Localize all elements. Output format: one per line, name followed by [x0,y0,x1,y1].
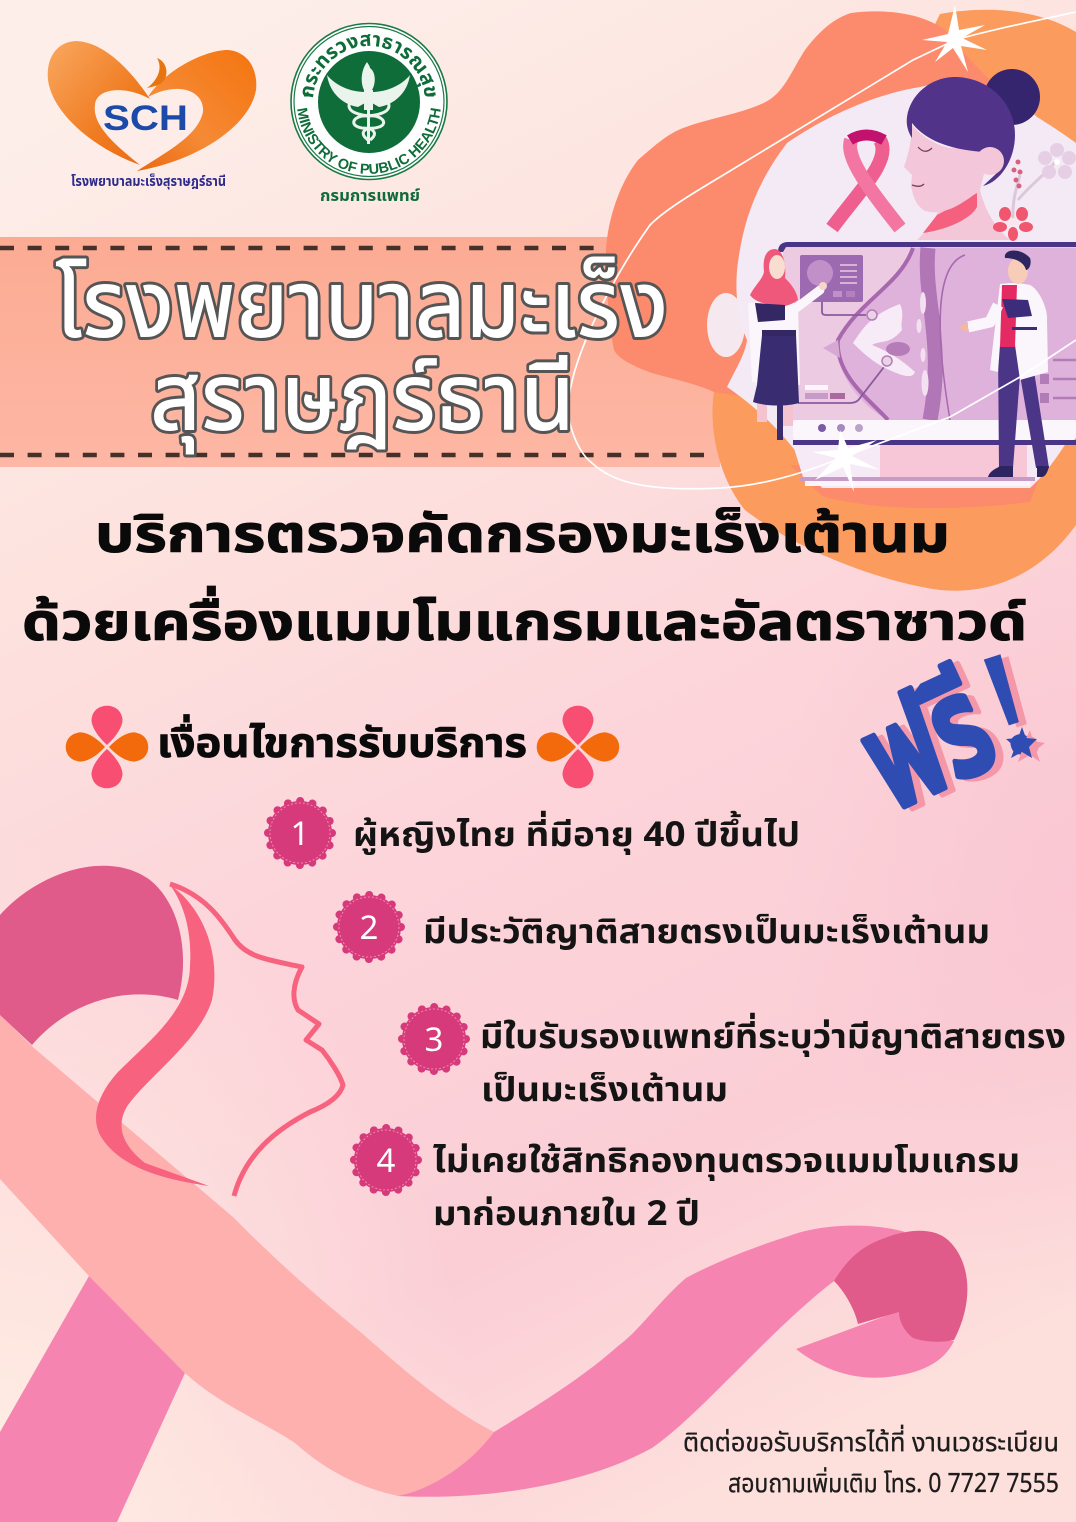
condition 4 [354,1128,1020,1241]
condition 3: เป็นมะเร็งเต้านม [481,1066,728,1117]
decorative blobs behind illustration [606,10,1076,591]
condition 1 [268,801,800,865]
ribbon curl tail [796,1311,954,1378]
contact information [683,1423,1059,1504]
caduceus emblem [327,62,410,144]
ribbon curl [834,1231,967,1342]
title: hospital name: สุราษฎร์ธานี [150,329,575,473]
logo: Ministry of Public Health seal: MINISTRY OF PUBLIC HEALTH [297,108,441,174]
pink ribbon [832,135,900,228]
lilac backdrop [727,84,1076,488]
flower icon left [66,706,148,788]
condition 1: ผู้หญิงไทย ที่มีอายุ 40 ปีขึ้นไป [353,810,800,862]
hair strand [96,885,214,1186]
illustration: mammogram screening [727,69,1076,488]
badge 2: 2 [360,904,378,954]
ribbon right band [398,1226,905,1497]
heading: service name: บริการตรวจคัดกรองมะเร็งเต้านม [95,498,950,576]
logo: Ministry of Public Health seal [290,22,448,209]
badge 1: 1 [291,810,309,860]
free stamp: ฟรี [837,628,1037,871]
flower sprig [993,143,1076,241]
doctor [958,250,1049,477]
screen [778,242,1076,420]
banner panel [0,237,720,467]
ribbon salmon band [0,1015,494,1496]
badge 2 [337,895,401,959]
seal text: กระทรวงสาธารณสุข [302,34,436,98]
heading: service name: ด้วยเครื่องแมมโมแกรมและอัลตราซาวด์ [22,586,1027,664]
condition 2 [337,895,990,959]
console [793,420,1076,486]
badge 3: 3 [425,1016,443,1066]
badge 4 [354,1128,418,1192]
contact information: ติดต่อขอรับบริการได้ที่ งานเวชระเบียน [683,1423,1059,1463]
flower icon right [537,706,619,788]
conditions heading [66,706,619,788]
logo wordmark: SCH [103,99,188,138]
free stamp: ! [959,604,1061,818]
woman [904,69,1040,240]
condition 2: มีประวัติญาติสายตรงเป็นมะเร็งเต้านม [423,908,990,959]
condition 3: มีใบรับรองแพทย์ที่ระบุว่ามีญาติสายตรง [480,1012,1066,1064]
title: hospital name [55,236,668,473]
condition 4: มาก่อนภายใน 2 ปี [433,1190,700,1241]
ribbon left leg [0,1276,185,1522]
face profile line [170,884,343,1196]
nurse [748,249,827,440]
logo: SCH hospital [48,41,256,193]
badge 1 [268,801,332,865]
badge 3 [402,1007,466,1071]
conditions title: เงื่อนไขการรับบริการ [157,714,527,776]
ribbon artwork with face silhouette [0,866,967,1522]
logo caption: โรงพยาบาลมะเร็งสุราษฎร์ธานี [71,172,226,193]
seal caption: กรมการแพทย์ [320,185,420,209]
free stamp: ฟรี [829,626,1029,869]
badge 4: 4 [377,1137,396,1187]
free stamp: ! [967,606,1069,820]
heading: service name [22,498,1027,664]
sparkle line [568,5,1076,492]
title: hospital name: โรงพยาบาลมะเร็ง [55,236,668,380]
condition 4: ไม่เคยใช้สิทธิกองทุนตรวจแมมโมแกรม [433,1137,1020,1188]
ribbon dark loop [0,866,183,1045]
condition 3 [402,1007,1066,1117]
